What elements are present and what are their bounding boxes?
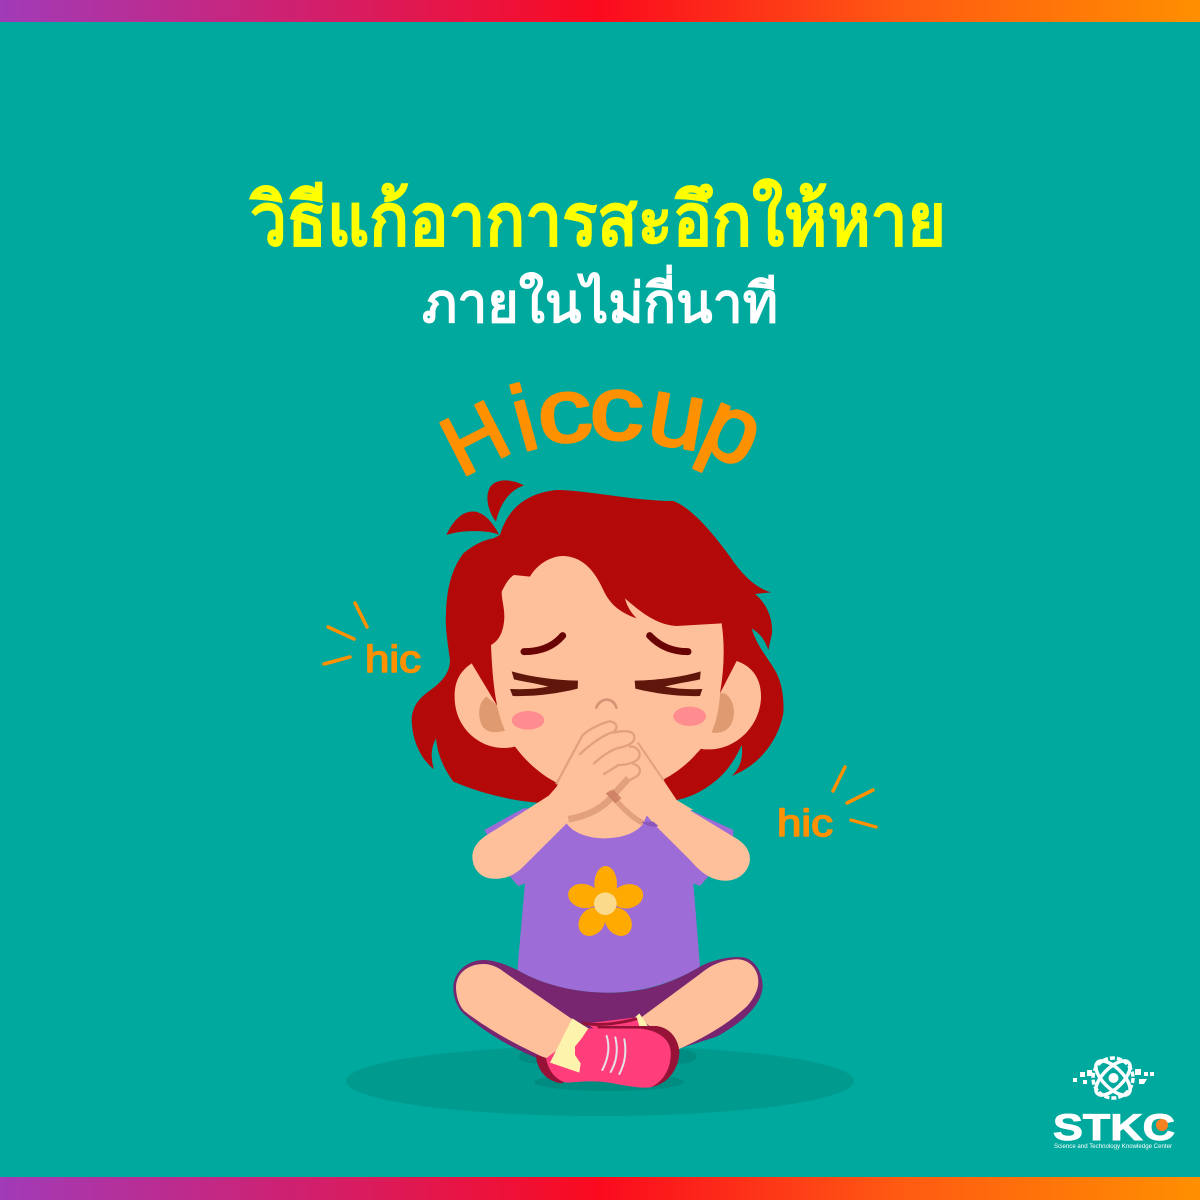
eyebrows bbox=[524, 636, 563, 652]
heading: Hiccup curved lettering: p bbox=[687, 370, 779, 488]
bottom gradient bar bbox=[0, 1177, 1200, 1200]
title: วิธีแก้อาการสะอึกให้หาย bbox=[249, 177, 946, 261]
flower on shirt bbox=[566, 866, 645, 941]
legs and shorts bbox=[453, 957, 763, 1064]
nose bbox=[596, 700, 616, 708]
illustration: girl covering mouth bbox=[412, 480, 784, 1088]
label: hic right with spark lines bbox=[777, 767, 876, 845]
shirt bbox=[484, 800, 733, 993]
heading: Hiccup curved lettering: u bbox=[641, 357, 714, 471]
cheeks bbox=[512, 711, 544, 730]
logo tagline: Science and Technology Knowledge Center bbox=[1054, 1144, 1172, 1150]
title: ภายในไม่กี่นาที bbox=[422, 264, 778, 334]
title bbox=[249, 177, 946, 334]
face skin bbox=[491, 556, 724, 795]
label: hic left with spark lines bbox=[324, 603, 421, 681]
ground shadow bbox=[346, 1046, 854, 1116]
heading: Hiccup curved lettering: i bbox=[501, 367, 547, 471]
eyes squeezed shut bbox=[510, 671, 578, 696]
neck bbox=[553, 800, 653, 838]
shoes and socks bbox=[536, 1013, 679, 1088]
heading: Hiccup curved lettering: c bbox=[587, 357, 647, 460]
ears bbox=[455, 663, 533, 748]
heading: Hiccup curved lettering: c bbox=[532, 359, 596, 464]
heading: Hiccup curved lettering bbox=[426, 357, 779, 494]
heading: Hiccup curved lettering: H bbox=[426, 383, 523, 494]
logo wordmark: STKC bbox=[1053, 1107, 1175, 1148]
label: hic left with spark lines: hic bbox=[365, 639, 421, 681]
top gradient bar bbox=[0, 0, 1200, 22]
clasped fingers bbox=[533, 721, 693, 817]
arms and hands bbox=[472, 760, 750, 881]
logo: STKC bbox=[1053, 1055, 1175, 1150]
logo atom icon bbox=[1073, 1055, 1154, 1101]
label: hic right with spark lines: hic bbox=[777, 803, 833, 845]
hair bbox=[412, 480, 784, 813]
wrist crossing shadows bbox=[568, 778, 658, 827]
face bbox=[455, 556, 761, 795]
